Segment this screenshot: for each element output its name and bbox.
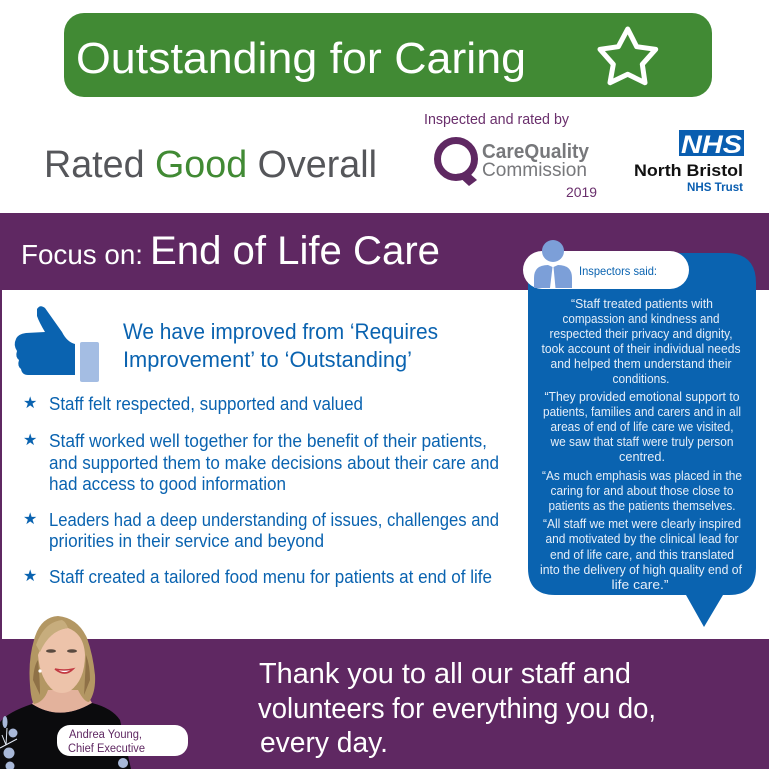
panel: focus header: End of Life Care (150, 229, 440, 273)
bullet list: ★ (23, 432, 37, 449)
left edge strip (0, 290, 2, 639)
panel: improvement summary (15, 306, 499, 587)
inspector quotes: we saw that staff were truly person (550, 435, 734, 449)
icon: thumbs up (15, 306, 99, 382)
bullet list: Staff felt respected, supported and valued (49, 394, 363, 414)
bullet list: Staff worked well together for the benefit of their patients, (49, 431, 487, 451)
thank you message: Thank you to all our staff and (259, 658, 631, 690)
inspector quotes: patients as the patients themselves. (548, 499, 736, 513)
improvement heading: We have improved from ‘Requires (123, 319, 438, 344)
icon: person (534, 240, 572, 288)
inspector quotes: areas of end of life care we visited, (550, 420, 734, 434)
inspector quotes: “Staff treated patients with (571, 297, 713, 311)
panel: thank you footer (0, 639, 769, 769)
inspector quotes: compassion and kindness and (562, 312, 720, 326)
thank you message: every day. (260, 727, 388, 759)
rating heading: Rated Good Overall (44, 144, 377, 186)
panel: inspectors speech bubble (523, 240, 756, 627)
bullet list: priorities in their service and beyond (49, 531, 324, 551)
inspector quotes: centred. (619, 450, 665, 464)
bullet list: had access to good information (49, 474, 286, 494)
panel: improvement summary: Improvement’ to ‘Outstanding’ (123, 347, 412, 372)
inspectors label (523, 251, 689, 289)
inspector quotes: and motivated by the clinical lead for (546, 532, 738, 546)
logo: Care Quality Commission: 2019 (566, 184, 597, 200)
bullet list: and supported them to make decisions about their care and (49, 453, 499, 473)
inspector quotes: took account of their individual needs (542, 342, 740, 356)
inspector quotes: end of life care, and this translated (550, 548, 734, 562)
bullet list: ★ (23, 568, 37, 585)
title banner: Outstanding for Caring (76, 34, 526, 83)
logo: North Bristol NHS Trust: NHS Trust (687, 180, 743, 194)
name label (57, 725, 188, 756)
inspector quotes: “All staff we met were clearly inspired (543, 517, 741, 531)
bullet list: ★ (23, 511, 37, 528)
panel: focus header: Focus on: (21, 239, 143, 270)
bullet list: Staff created a tailored food menu for patients at end of life (49, 567, 492, 587)
logo: Care Quality Commission: Inspected and rated by (424, 112, 570, 128)
logo: Care Quality Commission (424, 112, 597, 200)
inspector quotes: respected their privacy and dignity, (550, 327, 732, 341)
logo: North Bristol NHS Trust (634, 130, 744, 194)
panel: focus header (0, 213, 769, 290)
inspector quotes: patients, families and carers and in all (543, 405, 741, 419)
bullet list: ★ (23, 395, 37, 412)
name label: Chief Executive (68, 743, 145, 755)
bullet list: Leaders had a deep understanding of issues, challenges and (49, 510, 499, 530)
inspector quotes: “They provided emotional support to (544, 390, 740, 404)
title banner (64, 13, 712, 97)
logo: Care Quality Commission: CareQuality (482, 141, 590, 163)
thank you message: volunteers for everything you do, (258, 693, 656, 725)
logo: North Bristol NHS Trust: North Bristol (634, 161, 743, 180)
bullet list (23, 394, 499, 587)
thank you message (258, 658, 656, 759)
inspector quotes: conditions. (612, 372, 670, 386)
photo: chief executive (0, 616, 131, 769)
name label: Andrea Young, (69, 729, 142, 741)
inspector quotes: and helped them understand their (550, 357, 732, 371)
logo: North Bristol NHS Trust: NHS (681, 131, 742, 159)
inspector quotes: “As much emphasis was placed in the (542, 469, 742, 483)
inspector quotes: life care.” (612, 578, 668, 592)
inspector quotes: into the delivery of high quality end of (540, 563, 743, 577)
inspectors label: Inspectors said: (579, 264, 657, 278)
logo: Care Quality Commission: Commission (482, 159, 587, 181)
inspector quotes: caring for and about those close to (550, 484, 734, 498)
inspector quotes (540, 297, 743, 592)
